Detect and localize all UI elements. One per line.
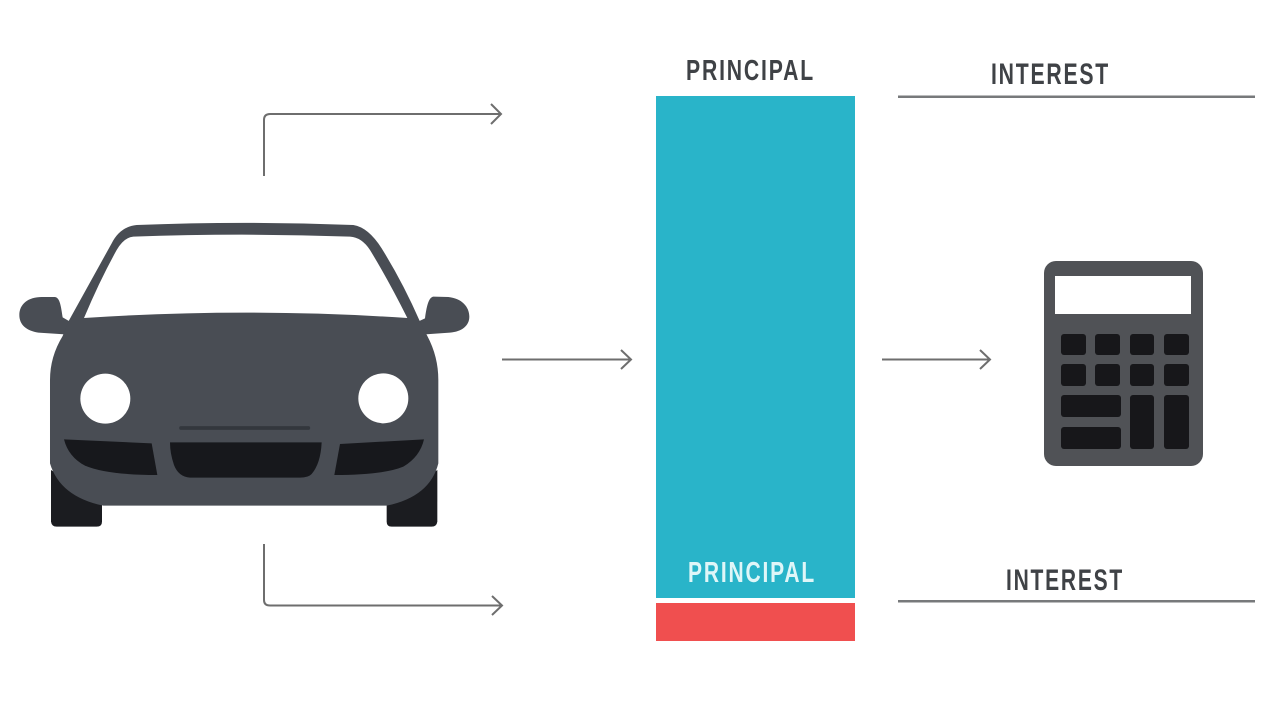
car mirrors bbox=[19, 297, 469, 334]
calculator case bbox=[1044, 261, 1203, 466]
arrow: car up to top row bbox=[264, 104, 501, 176]
heading: principal top label: PRINCIPAL bbox=[686, 55, 815, 87]
calculator buttons bbox=[1061, 334, 1189, 449]
car body and roof bbox=[50, 223, 438, 506]
bar segment: interest bbox=[656, 603, 855, 641]
icon: car front view bbox=[19, 223, 469, 527]
arrow: car to bar bbox=[502, 350, 631, 369]
car grilles bbox=[64, 439, 424, 478]
bar label: principal: PRINCIPAL bbox=[688, 557, 816, 589]
arrow: car down to bottom row bbox=[264, 544, 502, 615]
car wheels bbox=[51, 470, 437, 527]
car headlights bbox=[80, 373, 408, 424]
calculator screen bbox=[1055, 276, 1191, 314]
icon: calculator bbox=[1044, 261, 1203, 466]
heading: interest bottom label: INTEREST bbox=[1006, 564, 1124, 597]
heading: interest top label: INTEREST bbox=[991, 58, 1110, 91]
car hood slit bbox=[181, 422, 308, 433]
bar segment: principal bbox=[656, 96, 855, 598]
stacked bar chart bbox=[656, 96, 855, 641]
arrow: bar to calculator bbox=[882, 350, 990, 369]
